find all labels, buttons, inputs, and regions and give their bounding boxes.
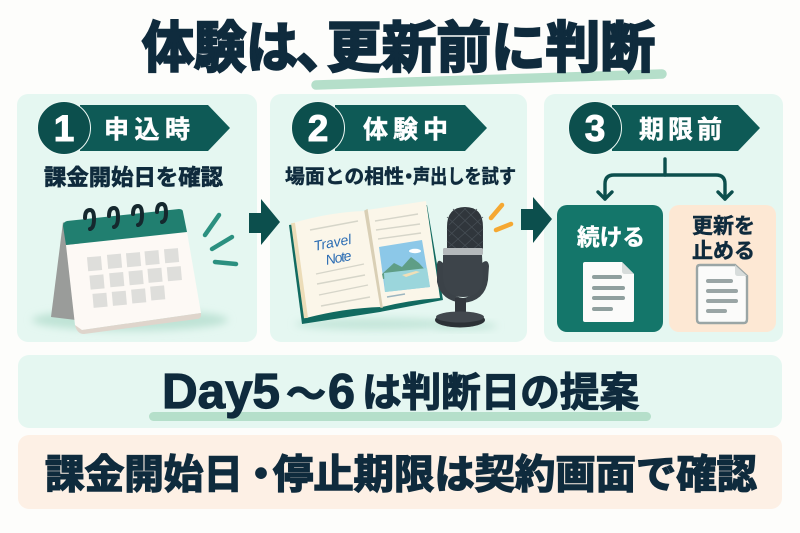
icon: open travel notebook [289,201,455,330]
notebook photo [379,240,430,292]
panel: confirmation note [18,435,782,509]
proposal text: は判断日の提案 [362,371,639,415]
confirmation text: 停止期限は契約画面で確認 [273,453,757,497]
proposal text: 〜 [286,373,326,417]
option: continue: 続ける [577,224,645,250]
step 1 banner [38,102,230,154]
option: stop renewal: 止める [692,240,755,263]
icon: sound lines [491,205,511,230]
icon: emphasis lines [205,215,236,264]
proposal underline [149,412,651,421]
proposal text: Day5 [162,365,280,419]
panel 3 background [544,94,783,342]
panel 2 background [270,94,527,342]
panel: step 1 application [17,94,257,342]
icon: calendar [32,204,228,334]
icon: document outlined [697,265,747,323]
title [142,17,662,85]
step 2 subtitle: 場面との相性 [285,166,404,188]
arrow: step 1 to step 2 [249,199,280,245]
step 1 subtitle: 課金開始日を確認 [44,165,223,190]
confirmation text: ・ [241,453,281,497]
step 3 banner [568,102,760,154]
handwritten note text: Travel [312,231,354,254]
panel 1 background [17,94,257,342]
step 2 banner: 体験中 [363,116,448,144]
panel: step 3 before deadline [544,94,783,342]
step 2 banner [292,102,487,154]
icon: microphone [433,207,497,330]
panel: step 2 trial [270,94,527,342]
step 1 banner: 1 [54,108,74,149]
arrow: step 2 to step 3 [521,197,552,243]
title text: 更新前に判断 [327,17,655,79]
confirmation text: 課金開始日 [45,453,243,497]
icon: document white [583,262,634,322]
handwritten note text [312,231,357,270]
option: stop renewal: 更新を [692,215,755,238]
handwritten note text: Note [324,247,353,268]
step 3 banner: 3 [585,108,605,149]
title text: 、 [296,17,351,79]
title text: 体験は [142,17,298,79]
panel: decision day proposal [18,355,782,428]
proposal text: 6 [328,365,355,419]
step 3 banner: 期限前 [639,116,722,144]
step 1 banner: 申込時 [104,116,190,144]
title underline [316,74,662,85]
step 2 subtitle: 声出しを試す [413,166,516,188]
option: continue [557,205,663,332]
step 2 banner: 2 [308,108,328,149]
step 2 subtitle: ・ [399,166,419,188]
option: stop renewal [669,205,776,332]
branching arrows [598,159,732,199]
